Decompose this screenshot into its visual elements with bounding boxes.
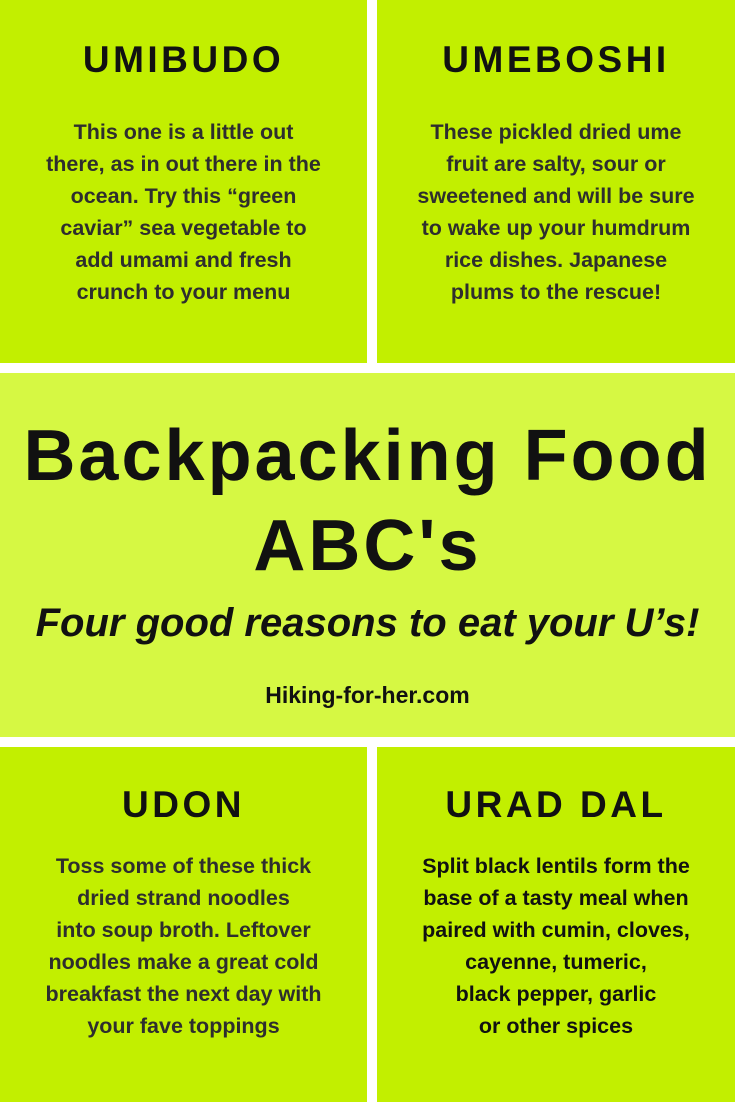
title: Backpacking Food: [23, 416, 712, 496]
heading: umibudo: UMIBUDO: [83, 39, 284, 80]
text: umeboshi: fruit are salty, sour or: [446, 152, 666, 176]
text: umibudo: crunch to your menu: [77, 280, 290, 304]
panel: urad dal: [377, 747, 735, 1102]
text: umeboshi: [417, 120, 695, 304]
text: umeboshi: rice dishes. Japanese: [445, 248, 667, 272]
heading: urad dal: URAD DAL: [445, 784, 667, 825]
text: udon: dried strand noodles: [77, 886, 290, 910]
text: udon: [46, 854, 322, 1038]
text: urad dal: base of a tasty meal when: [423, 886, 689, 910]
title: ABC's: [253, 506, 482, 586]
text: udon: your fave toppings: [87, 1014, 280, 1038]
text: umibudo: [46, 120, 321, 304]
text: urad dal: paired with cumin, cloves,: [422, 918, 690, 942]
panel: title band: [0, 373, 735, 737]
text: umibudo: there, as in out there in the: [46, 152, 321, 176]
text: urad dal: black pepper, garlic: [456, 982, 656, 1006]
panel: umeboshi: [377, 0, 735, 363]
text: urad dal: or other spices: [479, 1014, 633, 1038]
text: urad dal: cayenne, tumeric,: [465, 950, 647, 974]
text: udon: into soup broth. Leftover: [56, 918, 311, 942]
panel: udon: [0, 747, 367, 1102]
heading: udon: UDON: [122, 784, 245, 825]
title: [23, 416, 712, 586]
text: umibudo: This one is a little out: [74, 120, 293, 144]
text: udon: breakfast the next day with: [46, 982, 322, 1006]
text: umeboshi: to wake up your humdrum: [422, 216, 690, 240]
text: umeboshi: sweetened and will be sure: [417, 184, 695, 208]
text: umeboshi: plums to the rescue!: [451, 280, 661, 304]
subtitle: Four good reasons to eat your U’s!: [36, 601, 699, 645]
panel: umibudo: [0, 0, 367, 363]
text: umibudo: caviar” sea vegetable to: [60, 216, 307, 240]
text: umibudo: add umami and fresh: [75, 248, 292, 272]
text: udon: Toss some of these thick: [56, 854, 311, 878]
text: urad dal: Split black lentils form the: [422, 854, 690, 878]
text: umibudo: ocean. Try this “green: [71, 184, 296, 208]
text: umeboshi: These pickled dried ume: [431, 120, 681, 144]
heading: umeboshi: UMEBOSHI: [442, 39, 670, 80]
website: Hiking-for-her.com: [265, 682, 470, 708]
text: udon: noodles make a great cold: [48, 950, 319, 974]
text: urad dal: [422, 854, 690, 1038]
